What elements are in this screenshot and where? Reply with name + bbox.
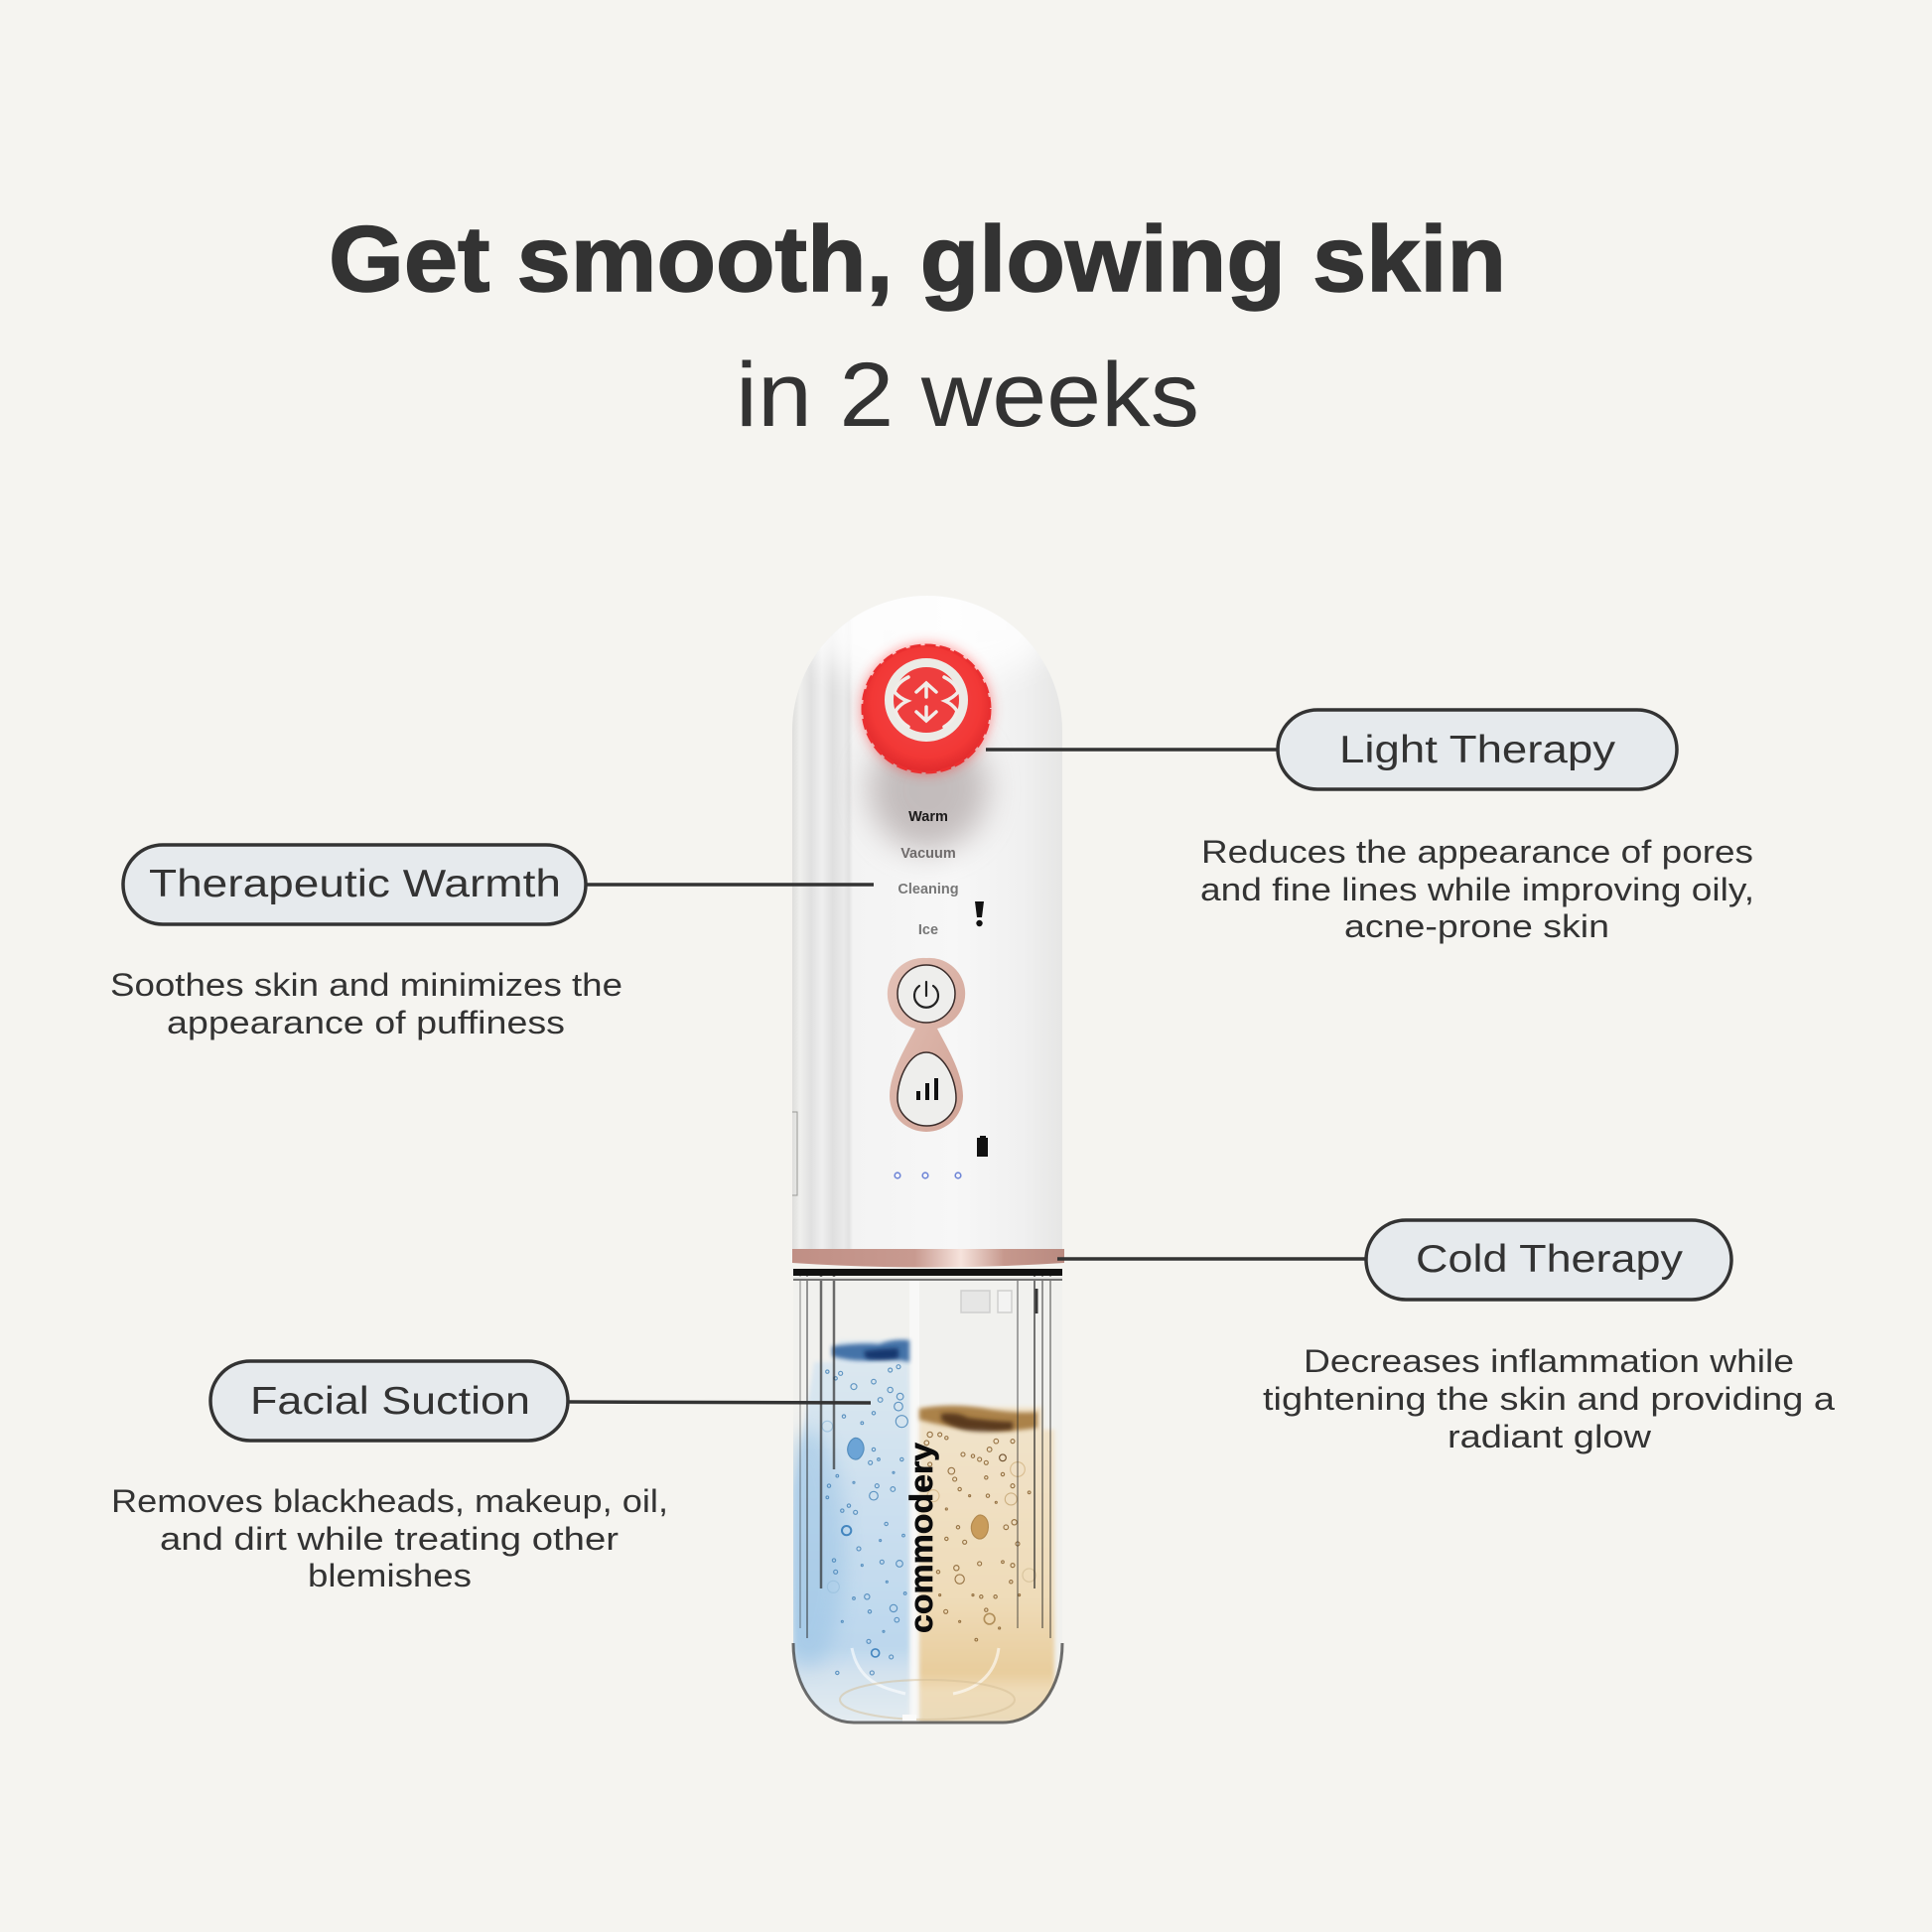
icon: battery <box>977 1136 988 1157</box>
amber dirty water <box>919 1406 1054 1723</box>
tank base curve <box>852 1648 999 1694</box>
description: Light Therapy: and fine lines while improving oily, <box>1200 872 1754 907</box>
description: Light Therapy: acne-prone skin <box>1344 908 1609 944</box>
indicator lights <box>895 1173 961 1178</box>
title <box>329 207 1506 446</box>
connector line <box>1057 1257 1365 1261</box>
description: Cold Therapy: radiant glow <box>1448 1419 1652 1454</box>
description: Facial Suction: Removes blackheads, makeup, oil, <box>111 1483 668 1519</box>
description: Facial Suction: blemishes <box>308 1558 472 1593</box>
description: Therapeutic Warmth: Soothes skin and minimizes the <box>110 967 622 1003</box>
tank top rim <box>793 1269 1063 1276</box>
title: Get smooth, glowing skin <box>329 207 1506 311</box>
description: Cold Therapy <box>1263 1343 1835 1454</box>
callout: Light Therapy <box>986 710 1677 789</box>
blue clean water <box>793 1336 913 1722</box>
pill text: Therapeutic Warmth: Therapeutic Warmth <box>149 863 561 905</box>
power and level buttons <box>888 958 965 1132</box>
mode labels: Warm <box>908 809 948 825</box>
description: Light Therapy <box>1200 834 1754 944</box>
connector line <box>986 748 1277 752</box>
connector line <box>586 883 874 887</box>
rose gold collar <box>792 1249 1064 1267</box>
description: Cold Therapy: tightening the skin and providing a <box>1263 1381 1835 1417</box>
description: Therapeutic Warmth: appearance of puffiness <box>167 1005 565 1040</box>
icon: signal bars <box>916 1078 938 1100</box>
icon: warning <box>975 901 984 926</box>
pill text: Facial Suction: Facial Suction <box>250 1380 530 1423</box>
title: in 2 weeks <box>736 345 1199 446</box>
description: Cold Therapy: Decreases inflammation while <box>1304 1343 1794 1379</box>
description: Facial Suction <box>111 1483 668 1593</box>
base rim <box>793 1643 1062 1723</box>
pill text: Light Therapy: Light Therapy <box>1339 729 1616 771</box>
mode labels: Ice <box>918 922 938 938</box>
description: Therapeutic Warmth <box>110 967 622 1040</box>
device body <box>792 566 1062 1251</box>
label pill <box>123 845 586 924</box>
label pill <box>210 1361 568 1441</box>
rear divider <box>909 1281 919 1727</box>
red light knob <box>861 643 992 774</box>
callout: Cold Therapy <box>1057 1220 1731 1300</box>
product: facial device <box>773 566 1064 1727</box>
mode labels <box>897 809 959 938</box>
brand wordmark: commodery <box>903 1443 939 1633</box>
mode labels: Cleaning <box>897 882 959 897</box>
label pill <box>1366 1220 1731 1300</box>
description: Light Therapy: Reduces the appearance of pores <box>1201 834 1753 870</box>
callout: Facial Suction <box>210 1361 871 1441</box>
connector line <box>569 1402 871 1403</box>
label pill <box>1278 710 1677 789</box>
callout: Therapeutic Warmth <box>123 845 874 924</box>
fill chamber tabs <box>961 1291 1012 1312</box>
water tank <box>773 1269 1063 1727</box>
mode labels: Vacuum <box>900 846 956 862</box>
icon: power <box>914 982 938 1008</box>
pill text: Cold Therapy: Cold Therapy <box>1416 1238 1684 1281</box>
tank ribs <box>800 1276 1050 1638</box>
description: Facial Suction: and dirt while treating other <box>160 1521 619 1557</box>
